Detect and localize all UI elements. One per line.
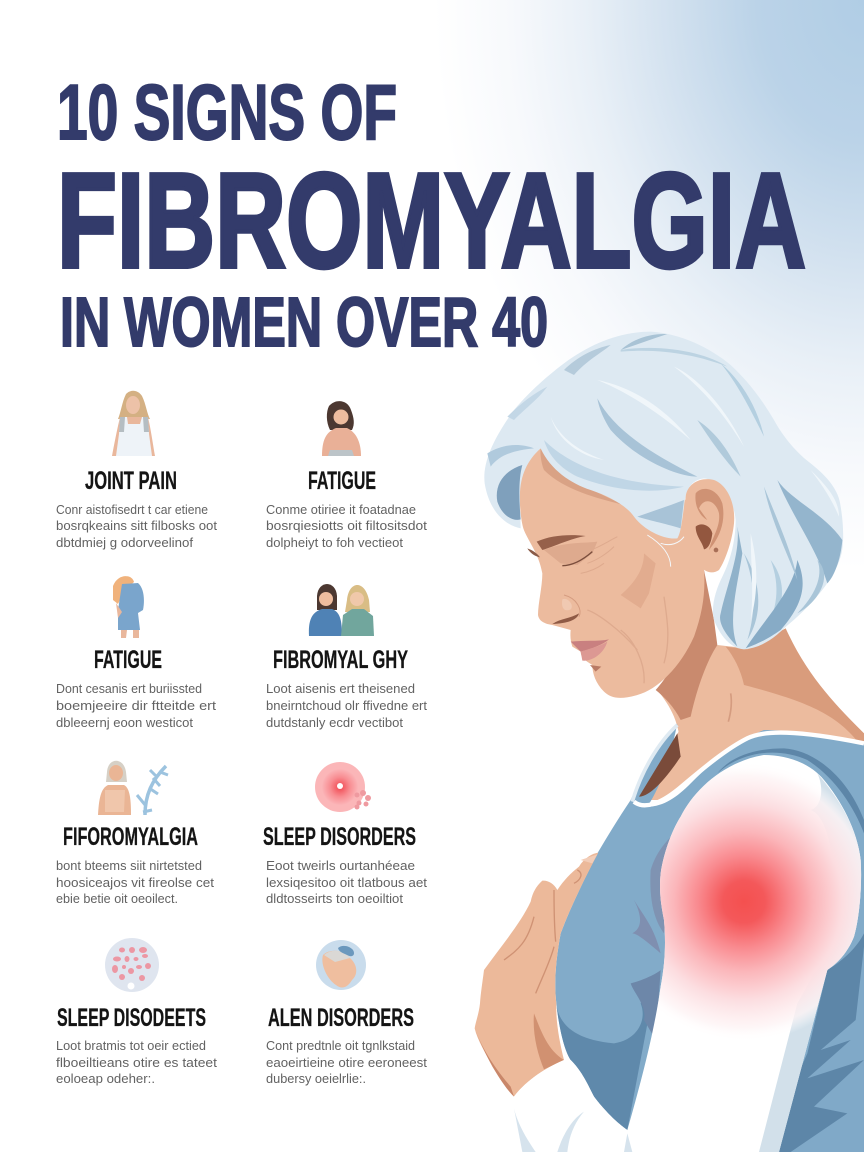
description: lexsiqesitoo oit tlatbous aet: [266, 876, 428, 890]
description: dbleeernj eoon westicot: [56, 716, 194, 730]
sign 1: joint pain: [56, 391, 218, 550]
icon: head with ice pack: [316, 940, 366, 990]
description: bont bteems siit nirtetsted: [56, 859, 202, 873]
description: dubersy oeielrlie:.: [266, 1072, 366, 1086]
description: dolpheiyt to foh vectieot: [266, 536, 404, 550]
description: eaoeirtieine otire eeroneest: [266, 1056, 428, 1070]
description: flboeiltieans otire es tateet: [56, 1056, 218, 1070]
illustration: woman holding painful shoulder: [475, 332, 864, 1152]
description: Dont cesanis ert buriissted: [56, 682, 202, 696]
description: eoloeap odeher:.: [56, 1072, 155, 1086]
neck: [657, 628, 864, 753]
title: IN WOMEN OVER 40: [60, 283, 548, 361]
cheek wrinkles: [587, 597, 668, 683]
nose: [562, 599, 572, 610]
hair: [484, 332, 843, 649]
description: [56, 682, 217, 730]
heading: FATIGUE: [94, 646, 162, 674]
sign 8: alen disorders: [266, 940, 428, 1086]
pain glow: [658, 768, 862, 1030]
icon: woman in white top: [112, 391, 155, 456]
description: dutdstanly ecdr vectibot: [266, 716, 404, 730]
description: bneirntchoud olr ffivedne ert: [266, 699, 428, 713]
description: hoosiceajos vit fireolse cet: [56, 876, 215, 890]
icon: two women: [309, 584, 374, 636]
description: [266, 682, 428, 730]
description: Conr aistofisedrt t car etiene: [56, 503, 208, 517]
heading: SLEEP DISODEETS: [57, 1004, 206, 1032]
heading: FATIGUE: [308, 467, 376, 495]
description: Eoot tweirls ourtanhéeae: [266, 859, 415, 873]
description: [56, 503, 218, 550]
icon: circle with pink cells: [105, 938, 159, 992]
icon: woman bent over: [113, 576, 144, 638]
mouth: [571, 639, 609, 652]
description: Loot aisenis ert theisened: [266, 682, 415, 696]
sign 2: fatigue: [266, 401, 428, 550]
heading: JOINT PAIN: [85, 467, 177, 495]
description: bosrqkeains sitt filbosks oot: [56, 519, 218, 533]
description: boemjeeire dir ftteitde ert: [56, 699, 217, 713]
description: [56, 1039, 218, 1086]
title: [57, 68, 806, 361]
heading: FIFOROMYALGIA: [63, 823, 198, 851]
eyebrow: [537, 535, 586, 550]
head and neck: [484, 332, 864, 753]
heading: FIBROMYAL GHY: [273, 646, 408, 674]
sign 5: fibromyalgia: [56, 761, 215, 906]
description: Conme otiriee it foatadnae: [266, 503, 416, 517]
description: dbtdmiej g odorveelinof: [56, 536, 194, 550]
description: dldtosseirts ton oeoiltiot: [266, 892, 404, 906]
sign 7: sleep disorders: [56, 938, 218, 1086]
heading: SLEEP DISORDERS: [263, 823, 416, 851]
icon: red pain target: [315, 762, 371, 812]
chest: [641, 731, 747, 800]
cuff: [514, 1060, 631, 1152]
icon: woman with nerve branch: [98, 761, 168, 815]
description: [266, 1039, 428, 1086]
neckline: [639, 733, 681, 797]
torso and arms: [475, 723, 864, 1152]
sign 3: fatigue: [56, 576, 217, 730]
title: 10 SIGNS OF: [57, 68, 397, 156]
shirt: [555, 723, 864, 1152]
description: bosrqiesiotts oit filtositsdot: [266, 519, 428, 533]
heading: ALEN DISORDERS: [268, 1004, 414, 1032]
description: Loot bratmis tot oeir ectied: [56, 1039, 206, 1053]
sign 4: fibromyalgia: [266, 584, 428, 730]
description: [266, 859, 428, 906]
description: [266, 503, 428, 550]
description: ebie betie oit oeoilect.: [56, 892, 178, 906]
sleeve: [627, 755, 861, 1152]
description: Cont predtnle oit tgnlkstaid: [266, 1039, 415, 1053]
description: [56, 859, 215, 906]
face: [520, 448, 704, 698]
hand: [475, 853, 598, 1097]
icon: woman with dark hair: [322, 401, 361, 456]
closed eye: [562, 552, 592, 566]
ear: [685, 479, 734, 572]
sign 6: sleep disorders: [263, 762, 428, 906]
